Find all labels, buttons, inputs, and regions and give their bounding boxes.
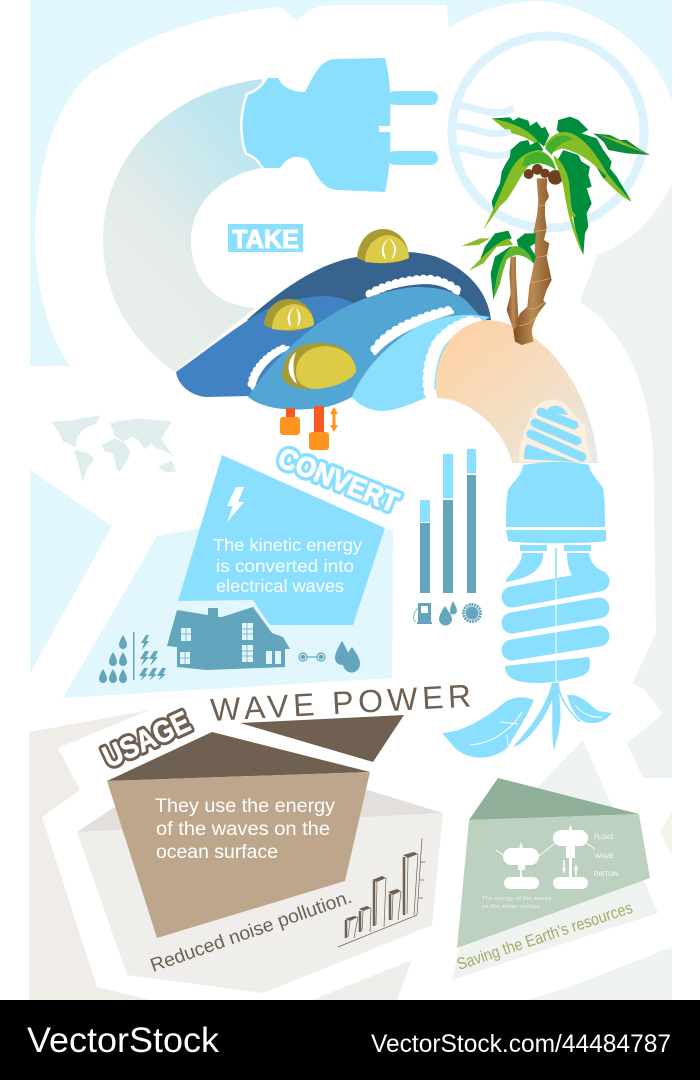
diagram caption: The energy of the waves	[482, 896, 551, 902]
diagram labels	[594, 834, 618, 878]
turbine dome top	[357, 229, 409, 263]
bulb coils	[512, 581, 599, 650]
small trunk	[507, 257, 519, 330]
background: beige usage plate	[77, 813, 443, 993]
icon: spiral light bulb with leaves	[442, 399, 612, 758]
panel: usage body	[107, 772, 370, 938]
panel: convert main	[178, 455, 385, 625]
peach hill gradient	[436, 320, 598, 463]
background: bottom beige wedge	[312, 960, 412, 1000]
diagram caption	[482, 896, 551, 910]
background: lower-right grey triangle	[452, 740, 658, 980]
foam on blue wave	[251, 347, 288, 388]
right leaf	[567, 695, 612, 723]
background: right grey field	[580, 183, 672, 778]
footer brand: VectorStock	[27, 1021, 220, 1060]
palm fronds	[483, 117, 650, 255]
left leaf	[442, 697, 534, 758]
dark back wave	[247, 252, 491, 380]
usage text: They use the energy	[155, 796, 336, 817]
background: top light-blue field	[30, 0, 672, 366]
diagram: float and piston	[503, 824, 588, 889]
mid blue wave	[176, 296, 357, 397]
piston left	[280, 408, 300, 435]
leaf veins	[470, 705, 602, 746]
piston right	[309, 406, 329, 450]
foam on dark wave	[369, 279, 458, 296]
bulb stems	[505, 553, 543, 582]
footer url: VectorStock.com/44484787	[371, 1030, 671, 1058]
label: CONVERT: CONVERT	[274, 442, 403, 518]
diagram labels: FLOAT	[594, 834, 614, 841]
title: WAVE POWER: WAVE POWER	[209, 677, 472, 728]
background: beige plate shadow	[77, 790, 443, 832]
label: CONVERT: CONVERT	[274, 442, 403, 518]
wave machine illustration	[176, 229, 598, 463]
light-blue middle wave	[248, 287, 480, 410]
icon: sun	[464, 604, 480, 622]
foam on middle wave	[375, 310, 452, 353]
footer bar	[0, 1000, 700, 1080]
diagram caption: on the water surface	[482, 904, 540, 910]
bulb base	[506, 462, 605, 527]
panel: saving resources	[457, 778, 650, 948]
icon: power plug	[243, 58, 438, 192]
label: USAGE: USAGE	[98, 706, 195, 774]
icon: fuel pump	[414, 603, 432, 624]
bulb spiral	[524, 406, 582, 462]
usage text	[155, 796, 336, 863]
icon: house	[167, 607, 290, 670]
world map	[52, 416, 176, 482]
root stem	[513, 683, 561, 750]
icon: large drops	[335, 641, 360, 672]
icon: water drops and lightning tally	[99, 632, 166, 683]
small palm fronds	[462, 231, 536, 299]
label: TAKE: TAKE	[232, 224, 299, 254]
coconuts	[524, 164, 563, 185]
panel: usage roof	[107, 732, 370, 781]
bulb plates	[520, 545, 591, 551]
bar chart: energy sources	[414, 449, 480, 626]
background: bottom-right grey wedge	[527, 947, 672, 1000]
panel: convert backdrop	[63, 527, 393, 698]
arrow: up and down	[330, 407, 338, 432]
foam on front wave	[428, 320, 478, 394]
convert text: The kinetic energy	[213, 535, 362, 555]
icon: oil drops	[439, 601, 457, 626]
front cyan wave	[352, 315, 490, 411]
icon: connector	[299, 653, 325, 661]
usage text: of the waves on the	[156, 819, 330, 840]
bulb spiral outline	[519, 399, 592, 462]
brown banner under title	[240, 715, 404, 762]
palm trees	[462, 117, 650, 345]
bulb collar	[506, 530, 606, 543]
turbine dome large	[282, 343, 356, 389]
background: cream triangle	[660, 812, 672, 856]
icon: lightning bolt	[227, 487, 244, 522]
convert text	[213, 535, 362, 596]
usage text: ocean surface	[156, 842, 278, 863]
right root	[558, 684, 580, 722]
caption: saving the Earth's resources: Saving the Earth's resources	[455, 899, 635, 974]
diagram labels: PISTON	[594, 871, 618, 878]
label: USAGE: USAGE	[98, 706, 195, 774]
circle with waves emblem	[450, 36, 644, 228]
diagram wave lines	[496, 843, 595, 856]
gradient swoosh behind plug	[103, 79, 262, 372]
tall trunk	[513, 178, 552, 345]
chart: small 3D bars	[338, 838, 425, 947]
background: left beige field	[29, 710, 150, 1000]
background: left light-blue triangle	[30, 470, 112, 673]
caption: reduced noise pollution: Reduced noise pollution.	[148, 887, 355, 977]
diagram labels: WAVE	[595, 853, 615, 860]
convert text: electrical waves	[216, 576, 344, 596]
turbine dome middle	[264, 299, 314, 331]
convert text: is converted into	[216, 556, 354, 576]
